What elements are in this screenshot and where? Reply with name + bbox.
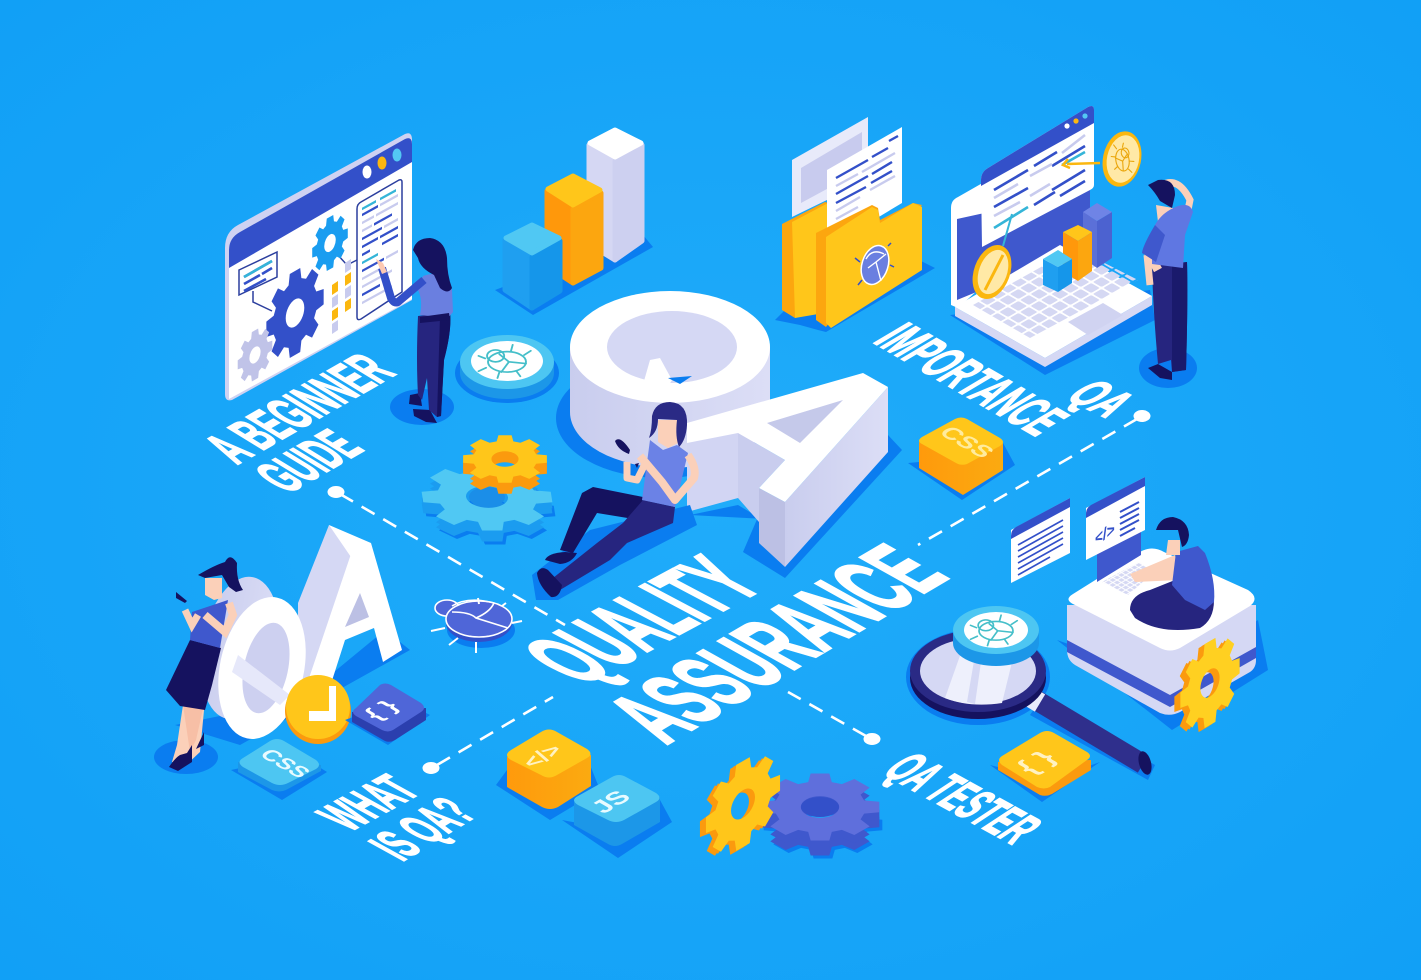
heading: a beginner guide — [190, 345, 409, 501]
letter Q — [190, 570, 318, 747]
small QA letters — [175, 525, 410, 747]
code window small — [1011, 498, 1070, 583]
key: css blue: CSS — [254, 746, 316, 781]
key: curly braces indigo — [345, 684, 430, 745]
icon: bug on folder — [855, 242, 894, 288]
key: curly braces indigo: { } — [358, 696, 405, 724]
person: woman sitting — [532, 402, 697, 600]
person: man thinking — [1139, 180, 1197, 388]
front document — [827, 127, 902, 248]
magnifier — [906, 606, 1155, 780]
icon: yellow and blue gears — [396, 425, 581, 558]
person: woman at window — [376, 238, 454, 425]
heading: importance qa: IMPORTANCE — [861, 315, 1082, 444]
icon: yellow gear — [1174, 624, 1240, 746]
bar chart — [495, 130, 653, 315]
folder with documents — [775, 117, 935, 332]
icon: beetle — [431, 598, 522, 653]
icon: bug button — [953, 606, 1039, 666]
heading: quality assurance — [499, 531, 971, 756]
key: curly braces yellow — [990, 731, 1100, 802]
heading: what is qa: WHAT — [304, 767, 434, 838]
big 3D QA letters — [556, 291, 902, 578]
key: css blue — [231, 739, 327, 800]
key: code tag orange: </> — [516, 741, 570, 772]
key: curly braces yellow: { } — [1009, 747, 1064, 778]
letter A — [298, 525, 402, 690]
panel: coder on platform — [1011, 477, 1268, 746]
laptop — [950, 106, 1155, 375]
code window large: </> — [1095, 519, 1115, 549]
heading: qa tester: QA TESTER — [870, 745, 1055, 852]
heading: importance qa — [861, 315, 1149, 444]
icon: bug button — [455, 335, 559, 403]
heading: quality assurance: ASSURANCE — [583, 531, 971, 756]
heading: a beginner guide: GUIDE — [241, 421, 377, 501]
heading: importance qa: QA — [1054, 372, 1149, 424]
icon: bottom gears — [700, 740, 907, 872]
person: woman with phone — [154, 557, 243, 774]
icon: big gear — [266, 255, 324, 371]
key: code tag orange — [496, 730, 600, 820]
key: css yellow: CSS — [933, 423, 1000, 462]
heading: a beginner guide: A BEGINNER — [190, 345, 409, 472]
heading: what is qa — [304, 767, 490, 868]
connector dashed lines — [328, 410, 1150, 774]
laptop bar chart — [1043, 203, 1112, 292]
heading: what is qa: IS QA? — [356, 790, 490, 868]
key: css yellow — [908, 418, 1015, 500]
panel: browser window with gears — [225, 133, 412, 400]
key: js blue — [562, 775, 672, 858]
code window large — [1086, 477, 1145, 582]
heading: quality assurance: QUALITY — [499, 543, 787, 697]
letter A — [687, 373, 888, 567]
floating window — [981, 106, 1094, 247]
key: js blue: JS — [584, 786, 637, 817]
icon: yellow check coin — [285, 675, 351, 744]
letter Q — [570, 291, 770, 468]
coin callouts — [966, 128, 1146, 304]
back document — [792, 117, 868, 217]
person: coder — [1130, 517, 1214, 630]
